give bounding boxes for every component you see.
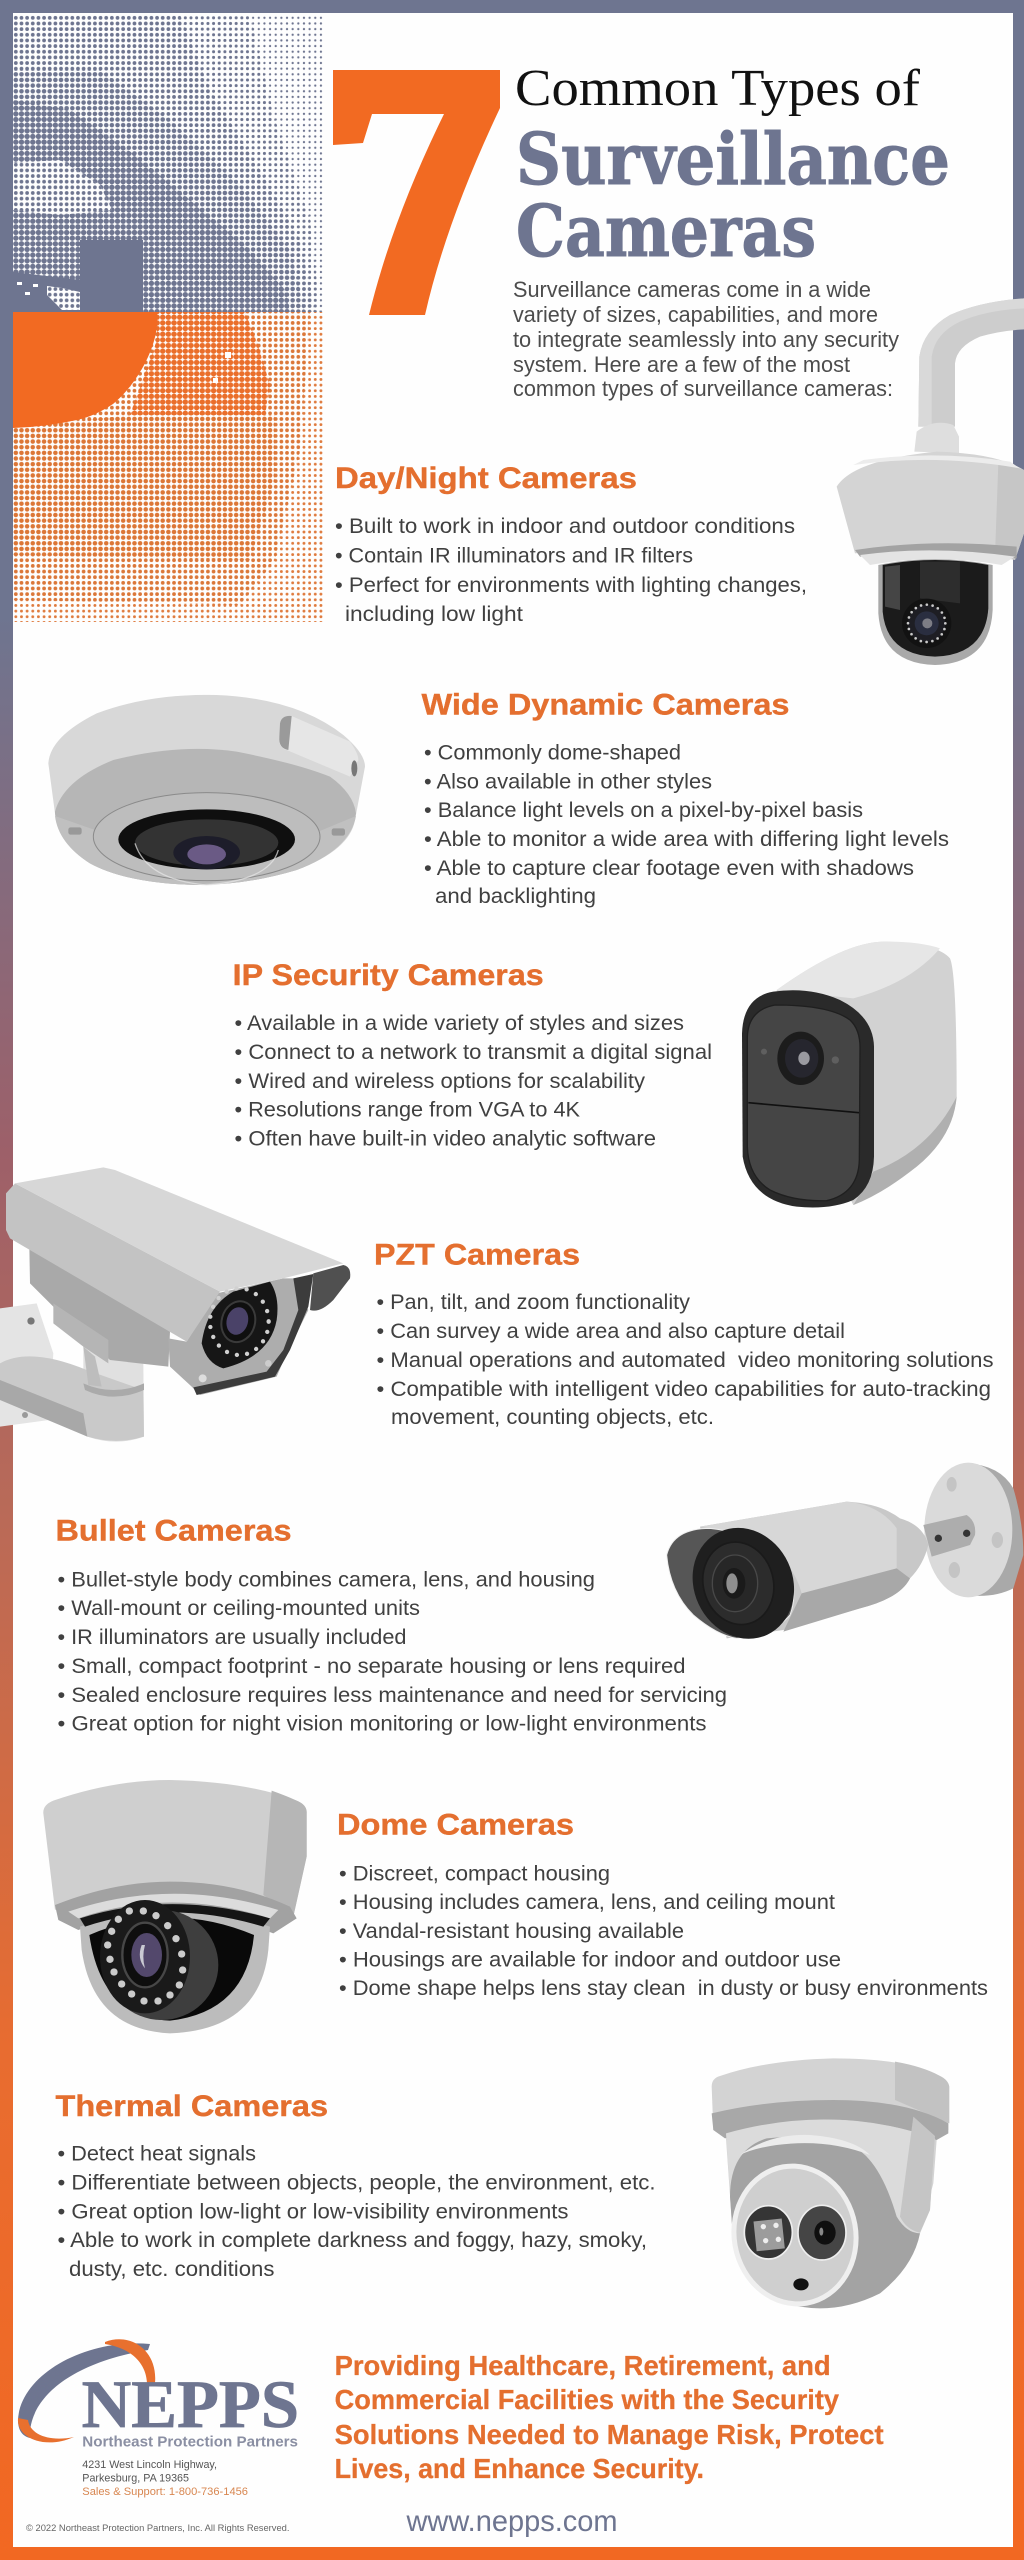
tagline: Lives, and Enhance Security.: [335, 2453, 704, 2484]
section: dome cameras: Dome Cameras: [337, 1809, 574, 1842]
tagline: Providing Healthcare, Retirement, and: [335, 2350, 831, 2381]
icon: wide dynamic dome camera: [48, 695, 365, 885]
section: bullet cameras: • Wall-mount or ceiling-mounted units: [58, 1597, 420, 1620]
section: IP security cameras: • Connect to a network to transmit a digital signal: [234, 1041, 712, 1064]
section: IP security cameras: • Resolutions range from VGA to 4K: [234, 1099, 580, 1122]
section: day/night cameras: • Built to work in indoor and outdoor conditions: [335, 515, 795, 538]
section: dome cameras: • Housing includes camera, lens, and ceiling mount: [339, 1891, 835, 1914]
section: IP security cameras: IP Security Cameras: [233, 959, 544, 992]
section: bullet cameras: • Sealed enclosure requires less maintenance and need for servicing: [58, 1684, 727, 1707]
section: IP security cameras: • Available in a wide variety of styles and sizes: [234, 1012, 684, 1035]
section: dome cameras: • Discreet, compact housing: [339, 1862, 610, 1886]
title: Cameras: [516, 189, 816, 273]
NEPPS logo: NEPPS: [82, 2366, 299, 2442]
section: wide dynamic cameras: • Balance light levels on a pixel-by-pixel basis: [424, 799, 863, 822]
section: thermal cameras: • Great option low-light or low-visibility environments: [58, 2201, 568, 2224]
halftone eye graphic: [13, 15, 323, 622]
intro paragraph: Surveillance cameras come in a wide: [513, 277, 871, 302]
section: PZT cameras: PZT Cameras: [374, 1239, 580, 1272]
section: IP security cameras: • Wired and wireless options for scalability: [234, 1070, 646, 1093]
section: wide dynamic cameras: • Commonly dome-shaped: [424, 742, 681, 764]
intro paragraph: common types of surveillance cameras:: [513, 376, 893, 401]
section: bullet cameras: • IR illuminators are usually included: [58, 1626, 406, 1649]
big orange numeral seven: [333, 70, 500, 315]
contact address: [82, 2459, 248, 2498]
section: wide dynamic cameras: [422, 689, 949, 908]
section: wide dynamic cameras: • Also available in other styles: [424, 770, 712, 794]
section: dome cameras: • Dome shape helps lens stay clean in dusty or busy environments: [339, 1977, 988, 2000]
section: thermal cameras: • Detect heat signals: [58, 2143, 256, 2166]
section: thermal cameras: • Able to work in complete darkness and foggy, hazy, smoky,: [58, 2229, 647, 2252]
icon: dome camera: [43, 1780, 307, 2033]
section: dome cameras: [337, 1809, 988, 2000]
contact address: 4231 West Lincoln Highway,: [82, 2459, 217, 2471]
NEPPS logo: Northeast Protection Partners: [82, 2434, 298, 2451]
title: Common Types of: [515, 60, 921, 117]
section: bullet cameras: Bullet Cameras: [56, 1515, 292, 1548]
section: IP security cameras: • Often have built-in video analytic software: [234, 1128, 656, 1151]
intro paragraph: system. Here are a few of the most: [513, 352, 850, 377]
contact address: Sales & Support: 1-800-736-1456: [82, 2486, 248, 2498]
section: wide dynamic cameras: • Able to capture clear footage even with shadows: [424, 857, 914, 880]
section: PZT cameras: • Pan, tilt, and zoom functionality: [376, 1291, 691, 1314]
tagline: Solutions Needed to Manage Risk, Protect: [335, 2419, 884, 2450]
section: wide dynamic cameras: Wide Dynamic Cameras: [422, 689, 790, 722]
section: thermal cameras: Thermal Cameras: [56, 2090, 328, 2123]
section: thermal cameras: dusty, etc. conditions: [69, 2258, 274, 2281]
section: day/night cameras: including low light: [345, 603, 523, 626]
section: PZT cameras: movement, counting objects, etc.: [391, 1406, 714, 1429]
section: day/night cameras: • Contain IR illuminators and IR filters: [335, 544, 693, 568]
NEPPS logo: [18, 2339, 299, 2451]
section: PZT cameras: • Compatible with intelligent video capabilities for auto-tracking: [376, 1378, 991, 1401]
tagline: Commercial Facilities with the Security: [335, 2384, 839, 2415]
contact address: Parkesburg, PA 19365: [82, 2473, 189, 2485]
section: PZT cameras: • Can survey a wide area and also capture detail: [376, 1320, 845, 1343]
section: day/night cameras: [335, 462, 807, 626]
section: bullet cameras: • Small, compact footprint - no separate housing or lens required: [58, 1655, 685, 1678]
copyright: © 2022 Northeast Protection Partners, Inc. All Rights Reserved.: [26, 2523, 290, 2534]
tagline: [335, 2350, 884, 2484]
section: PZT cameras: [374, 1239, 994, 1429]
section: wide dynamic cameras: and backlighting: [435, 885, 596, 908]
icon: thermal turret camera: [712, 2058, 949, 2317]
icon: PZT housing camera: [0, 1167, 350, 1442]
icon: bullet camera: [667, 1463, 1023, 1656]
section: bullet cameras: [56, 1515, 727, 1736]
section: thermal cameras: • Differentiate between objects, people, the environment, etc.: [58, 2172, 656, 2195]
section: day/night cameras: • Perfect for environments with lighting changes,: [335, 574, 807, 597]
section: thermal cameras: [56, 2090, 656, 2281]
intro paragraph: to integrate seamlessly into any security: [513, 327, 899, 352]
intro paragraph: [513, 277, 899, 401]
section: dome cameras: • Housings are available for indoor and outdoor use: [339, 1949, 841, 1972]
title: [515, 60, 950, 273]
section: bullet cameras: • Bullet-style body combines camera, lens, and housing: [58, 1569, 595, 1592]
section: PZT cameras: • Manual operations and automated video monitoring solutions: [376, 1349, 994, 1372]
icon: day/night ceiling camera: [837, 298, 1024, 665]
website url: www.nepps.com: [406, 2505, 618, 2538]
section: bullet cameras: • Great option for night vision monitoring or low-light environments: [58, 1712, 706, 1736]
icon: IP battery camera: [742, 942, 957, 1207]
section: dome cameras: • Vandal-resistant housing available: [339, 1920, 684, 1943]
section: IP security cameras: [233, 959, 712, 1151]
title: Surveillance: [516, 117, 950, 201]
section: day/night cameras: Day/Night Cameras: [335, 462, 637, 495]
intro paragraph: variety of sizes, capabilities, and more: [513, 302, 878, 327]
section: wide dynamic cameras: • Able to monitor a wide area with differing light levels: [424, 828, 949, 851]
